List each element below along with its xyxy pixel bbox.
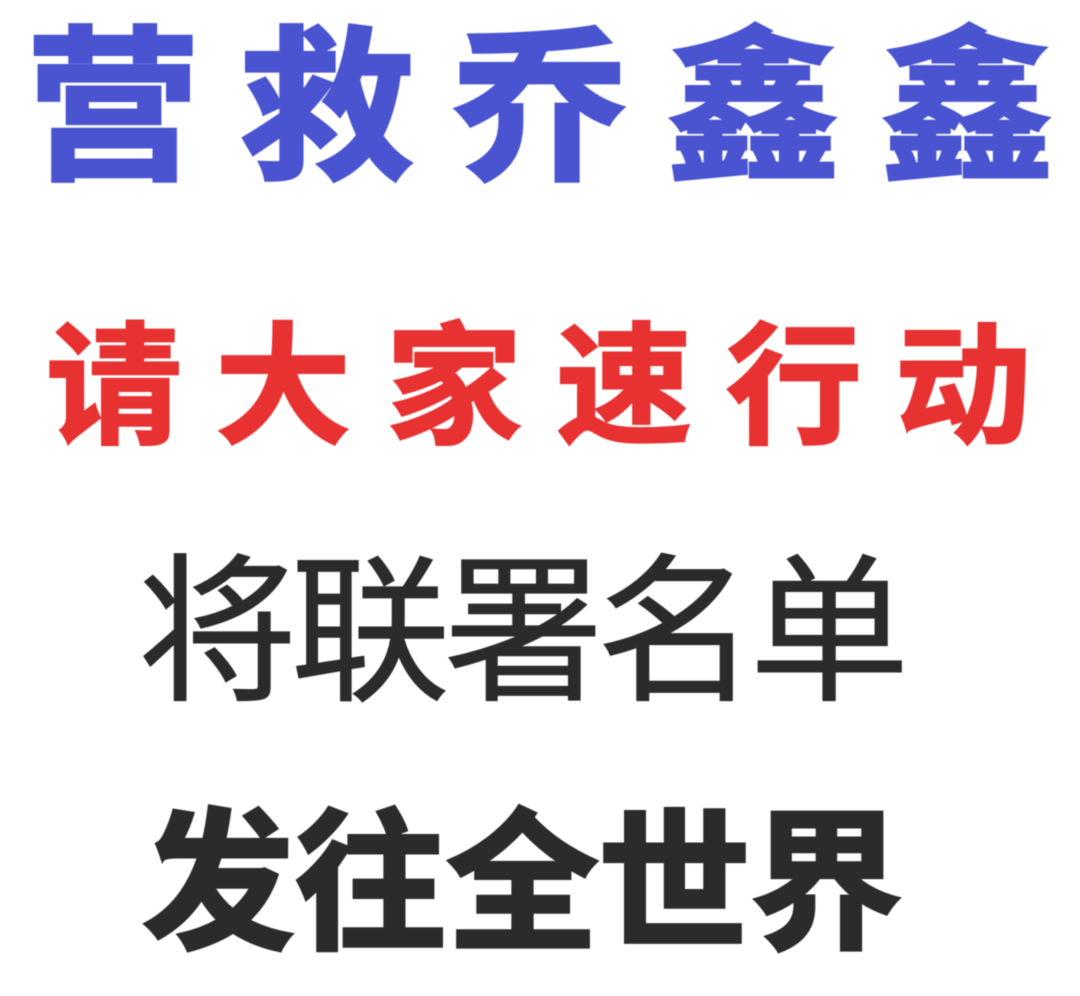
heading: rescue name: 乔	[453, 17, 627, 202]
heading: rescue name	[26, 17, 1054, 202]
heading: rescue name: 营	[26, 17, 200, 202]
subheading: call to action: 动	[895, 314, 1031, 461]
heading: rescue name: 鑫	[880, 17, 1054, 202]
subheading: call to action: 家	[386, 314, 522, 461]
subheading: call to action	[46, 314, 1031, 461]
text line: send worldwide: 发往全世界	[142, 799, 902, 970]
heading: rescue name: 救	[240, 17, 414, 202]
subheading: call to action: 行	[726, 314, 862, 461]
text line: petition list: 将联署名单	[137, 543, 902, 722]
heading: rescue name: 鑫	[666, 17, 840, 202]
subheading: call to action: 请	[46, 314, 182, 461]
subheading: call to action: 大	[215, 314, 351, 461]
subheading: call to action: 速	[556, 314, 692, 461]
